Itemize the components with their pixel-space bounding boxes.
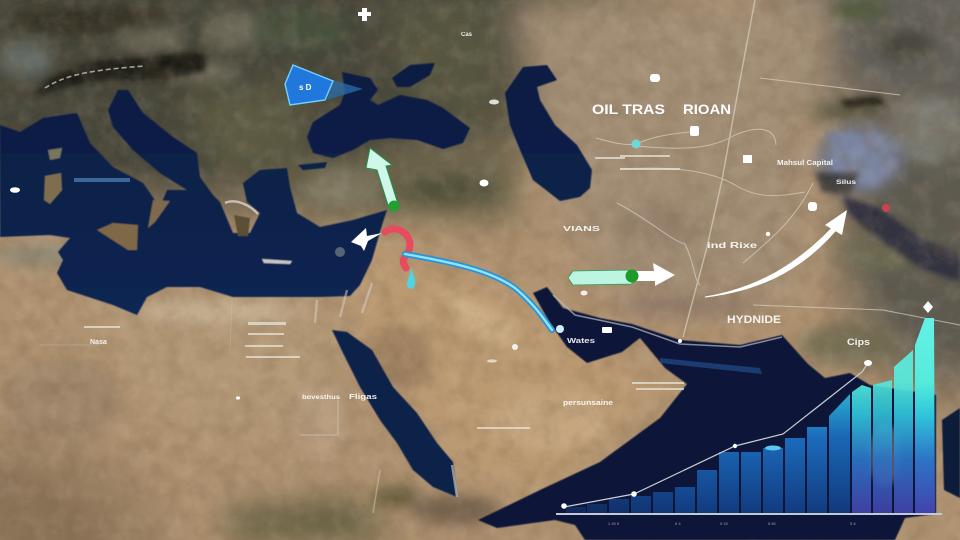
marker: Cyprus bbox=[335, 247, 345, 257]
peninsula: Italian toe bbox=[148, 200, 170, 228]
chart axis labels: 8 80 bbox=[768, 521, 777, 526]
route: cyan line bbox=[405, 254, 552, 330]
chart axis labels: 5 8 bbox=[850, 521, 856, 526]
map labels: Mahsul Capital bbox=[777, 160, 833, 167]
chart trend line bbox=[564, 363, 868, 507]
arrow: green east bbox=[568, 263, 675, 286]
chart axis labels: 1 25 5 bbox=[608, 521, 620, 526]
markers bbox=[10, 8, 817, 400]
chart axis labels bbox=[608, 521, 856, 526]
map labels: Silus bbox=[836, 180, 857, 186]
mountain snow line bbox=[45, 66, 145, 88]
chart points bbox=[561, 301, 933, 509]
map labels: Nasa bbox=[90, 339, 107, 346]
coast highlights bbox=[225, 201, 782, 497]
map labels: ind Rixe bbox=[707, 241, 758, 250]
arrow: white west bbox=[351, 228, 382, 251]
map labels: Cips bbox=[847, 337, 870, 347]
map labels: Wates bbox=[567, 338, 595, 345]
icon: cyan drop bbox=[407, 268, 415, 289]
chart highlight bbox=[765, 446, 781, 450]
route: red curve bbox=[385, 229, 410, 268]
sea: Mediterranean and Adriatic bbox=[0, 90, 387, 315]
legend strips bbox=[84, 155, 684, 429]
sea: Red Sea bbox=[332, 330, 457, 497]
mountains: Alps bbox=[36, 53, 205, 96]
title: RIOAN bbox=[683, 101, 731, 117]
panel: bar chart bbox=[556, 301, 942, 526]
map labels: HYDNIDE bbox=[727, 314, 781, 326]
mountains: Himalaya bbox=[825, 132, 898, 188]
map labels: persunsaine bbox=[563, 400, 613, 407]
island: Corsica bbox=[48, 148, 62, 160]
sea: Caspian bbox=[505, 65, 592, 201]
island: Crete bbox=[262, 259, 292, 264]
chart land through bars bbox=[869, 423, 901, 487]
sea: far right bbox=[942, 408, 960, 498]
island: Sardinia bbox=[44, 173, 62, 204]
map labels bbox=[90, 32, 870, 407]
island: Sicily bbox=[97, 223, 138, 250]
callout: blue wedge bbox=[285, 65, 363, 105]
map labels: VIANS bbox=[563, 226, 601, 233]
map labels: bovesthus bbox=[302, 395, 341, 401]
chart bars bbox=[566, 318, 935, 514]
arrow: green north bbox=[366, 148, 400, 212]
marker: cyan hub bbox=[632, 140, 640, 148]
island: Peloponnese bbox=[234, 215, 250, 236]
map labels: Fligas bbox=[349, 394, 377, 401]
land tones bbox=[0, 42, 53, 78]
sea: Persian Gulf and Arabian Sea bbox=[478, 287, 936, 540]
callout: blue wedge: s D bbox=[299, 83, 312, 92]
chart axis bbox=[556, 513, 942, 515]
title bbox=[592, 101, 731, 117]
marker: red hub bbox=[882, 204, 890, 212]
chart axis labels: 5 15 bbox=[720, 521, 729, 526]
arrow: white curve bbox=[705, 210, 847, 297]
sea: Black Sea bbox=[307, 72, 470, 158]
sea: Marmara bbox=[298, 162, 327, 170]
chart axis labels: 8 4 bbox=[675, 521, 681, 526]
sea strips bbox=[74, 178, 762, 374]
title: OIL TRAS bbox=[592, 101, 665, 117]
map labels: Cas bbox=[461, 32, 473, 38]
sea: Azov bbox=[392, 63, 435, 87]
